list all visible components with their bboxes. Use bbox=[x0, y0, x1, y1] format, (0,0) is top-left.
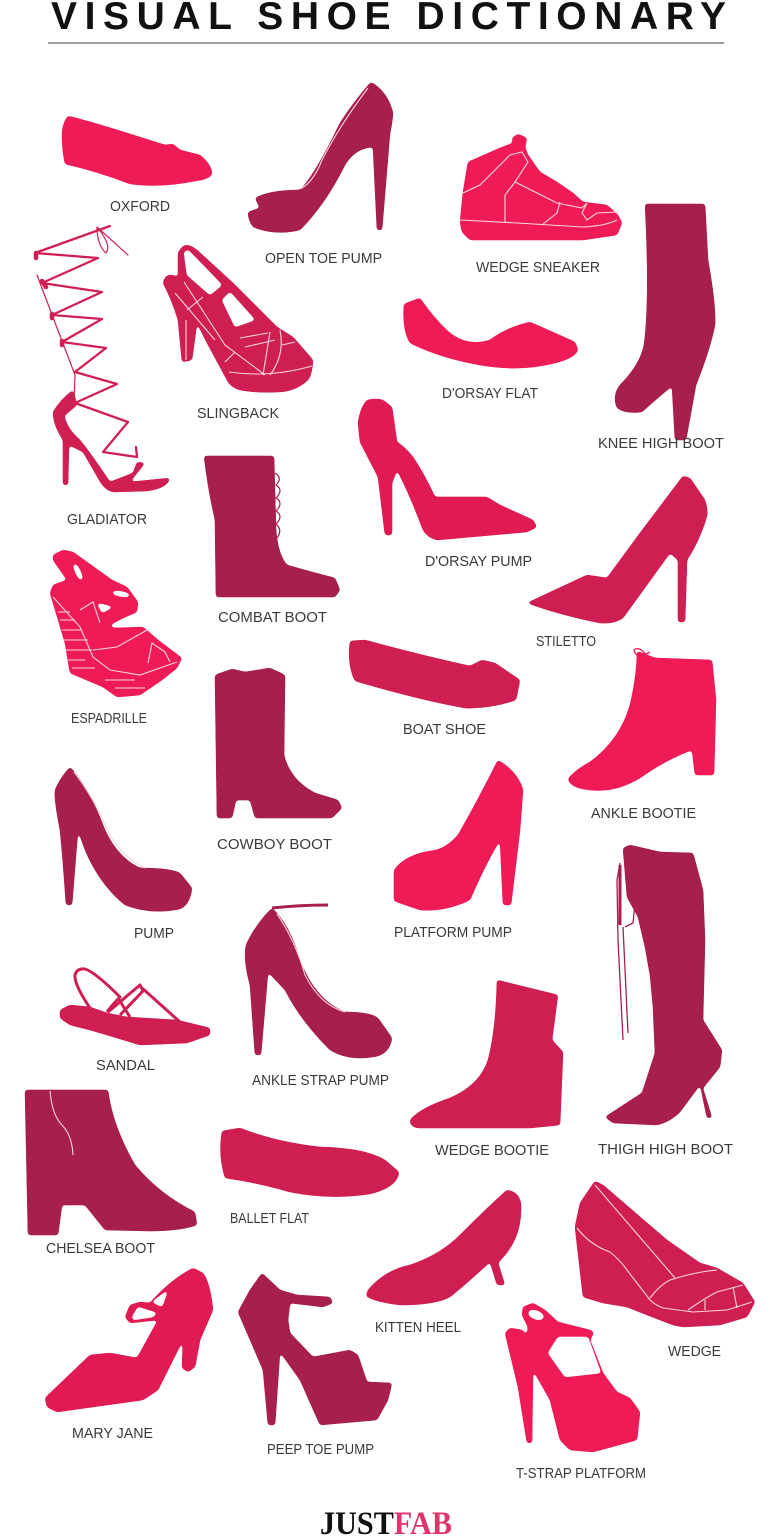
shoe icon: mary jane bbox=[45, 1268, 213, 1412]
label: pump: PUMP bbox=[134, 926, 174, 942]
shoe icon: platform pump bbox=[394, 760, 523, 910]
label: platform pump: PLATFORM PUMP bbox=[394, 925, 512, 941]
shoe icon: chelsea boot bbox=[25, 1090, 197, 1235]
label: open toe pump: OPEN TOE PUMP bbox=[265, 251, 382, 267]
shoe icon: combat boot bbox=[204, 456, 340, 597]
label: stiletto: STILETTO bbox=[536, 634, 596, 650]
label: gladiator: GLADIATOR bbox=[67, 512, 147, 528]
shoe icon: kitten heel bbox=[366, 1190, 521, 1305]
label: kitten heel: KITTEN HEEL bbox=[375, 1320, 461, 1336]
shoe icon: d'orsay flat bbox=[404, 298, 578, 368]
label: oxford: OXFORD bbox=[110, 199, 170, 215]
label: ballet flat: BALLET FLAT bbox=[230, 1211, 309, 1227]
shoe icon: oxford bbox=[62, 116, 212, 185]
label: chelsea boot: CHELSEA BOOT bbox=[46, 1241, 155, 1257]
label: slingback: SLINGBACK bbox=[197, 406, 279, 422]
shoe icon: thigh high boot bbox=[605, 845, 722, 1125]
shoe icon: wedge bbox=[575, 1181, 755, 1327]
label: sandal: SANDAL bbox=[96, 1058, 155, 1074]
label: knee high boot: KNEE HIGH BOOT bbox=[598, 436, 724, 452]
label: wedge sneaker: WEDGE SNEAKER bbox=[476, 260, 600, 276]
label: ankle bootie: ANKLE BOOTIE bbox=[591, 806, 696, 822]
label: boat shoe: BOAT SHOE bbox=[403, 722, 486, 738]
label: combat boot: COMBAT BOOT bbox=[218, 610, 327, 626]
shoe icon: boat shoe bbox=[349, 640, 520, 708]
label: thigh high boot: THIGH HIGH BOOT bbox=[598, 1142, 733, 1158]
shoe icon: ankle bootie bbox=[568, 649, 716, 790]
shoe icon: slingback bbox=[163, 245, 313, 392]
shoe icon: pump bbox=[55, 767, 192, 911]
shoe icon: gladiator bbox=[35, 226, 170, 492]
label: wedge bootie: WEDGE BOOTIE bbox=[435, 1143, 549, 1159]
label: cowboy boot: COWBOY BOOT bbox=[217, 837, 332, 853]
shoe icon: open toe pump bbox=[248, 82, 393, 232]
label: t-strap platform: T-STRAP PLATFORM bbox=[516, 1466, 646, 1482]
shoe icon: stiletto bbox=[527, 476, 707, 623]
label: ankle strap pump: ANKLE STRAP PUMP bbox=[252, 1073, 389, 1089]
label: d'orsay flat: D'ORSAY FLAT bbox=[442, 386, 538, 402]
label: d'orsay pump: D'ORSAY PUMP bbox=[425, 554, 532, 570]
shoe icon: d'orsay pump bbox=[358, 399, 537, 540]
shoe icon: ankle strap pump bbox=[245, 905, 392, 1058]
shoe icon: sandal bbox=[60, 969, 210, 1045]
shoe icon: wedge bootie bbox=[410, 980, 563, 1128]
label: peep toe pump: PEEP TOE PUMP bbox=[267, 1442, 374, 1458]
label: wedge: WEDGE bbox=[668, 1344, 721, 1360]
shoe icon: espadrille bbox=[50, 550, 182, 697]
shoe icon: t-strap platform bbox=[505, 1303, 640, 1452]
shoe icon: cowboy boot bbox=[215, 668, 342, 818]
label: espadrille: ESPADRILLE bbox=[71, 711, 147, 727]
shoe icon: knee high boot bbox=[615, 204, 715, 440]
shoe icon: ballet flat bbox=[221, 1128, 399, 1197]
label: mary jane: MARY JANE bbox=[72, 1426, 153, 1442]
shoe icon: peep toe pump bbox=[238, 1273, 392, 1425]
shoe icon: wedge sneaker bbox=[460, 134, 622, 240]
